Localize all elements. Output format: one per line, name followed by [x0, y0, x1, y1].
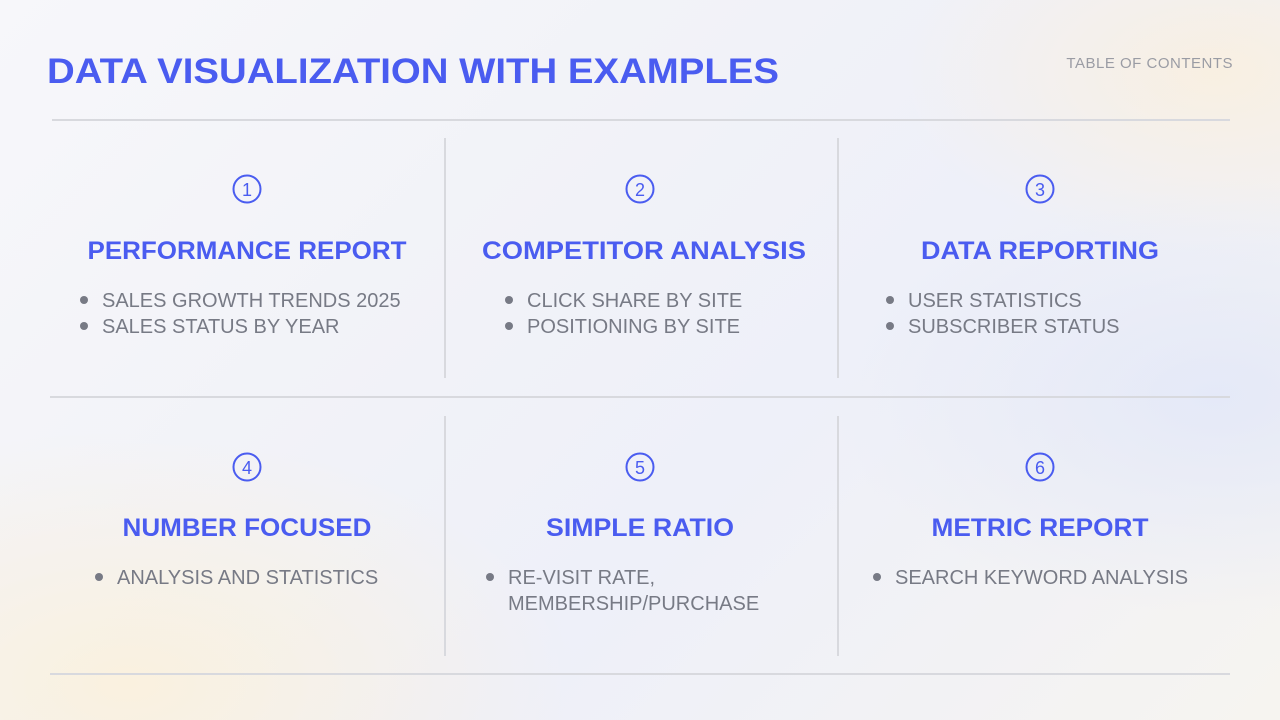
heading: SIMPLE RATIO [546, 514, 734, 542]
icon: number 1 [234, 176, 260, 202]
bullets [80, 290, 401, 338]
panel: number focused [95, 454, 378, 589]
heading: PERFORMANCE REPORT [88, 237, 406, 265]
bullets: SUBSCRIBER STATUS [908, 316, 1120, 338]
panel: metric report [873, 454, 1188, 589]
icon: number 4 [234, 454, 260, 480]
icon: number 1: 1 [242, 180, 252, 200]
panel: simple ratio [486, 454, 759, 615]
panel: competitor analysis [482, 176, 806, 338]
title: DATA VISUALIZATION WITH EXAMPLES [47, 52, 779, 91]
bullets: CLICK SHARE BY SITE [527, 290, 742, 312]
heading: COMPETITOR ANALYSIS [482, 237, 806, 265]
icon: number 2 [626, 176, 654, 202]
icon: number 4: 4 [242, 458, 252, 478]
bullets [886, 290, 1120, 338]
bullets: RE-VISIT RATE, [508, 567, 655, 589]
icon: number 3 [1026, 176, 1054, 202]
bullets: ANALYSIS AND STATISTICS [117, 567, 378, 589]
bullets: SALES STATUS BY YEAR [102, 316, 340, 338]
heading: DATA REPORTING [921, 237, 1159, 265]
icon: number 5 [626, 454, 654, 480]
bullets: SEARCH KEYWORD ANALYSIS [895, 567, 1188, 589]
heading: METRIC REPORT [932, 514, 1148, 542]
bullets: MEMBERSHIP/PURCHASE [508, 593, 759, 615]
icon: number 3: 3 [1035, 180, 1045, 200]
heading: NUMBER FOCUSED [122, 514, 372, 542]
bullets [486, 567, 759, 615]
icon: number 6 [1026, 454, 1054, 480]
subtitle: table of contents: TABLE OF CONTENTS [1066, 55, 1233, 72]
bullets: POSITIONING BY SITE [527, 316, 740, 338]
icon: number 6: 6 [1035, 458, 1045, 478]
bullets: SALES GROWTH TRENDS 2025 [102, 290, 401, 312]
icon: number 5: 5 [635, 458, 645, 478]
icon: number 2: 2 [635, 180, 645, 200]
panel: performance report [80, 176, 406, 338]
panel: data reporting [886, 176, 1159, 338]
bullets: USER STATISTICS [908, 290, 1082, 312]
bullets [505, 290, 742, 338]
